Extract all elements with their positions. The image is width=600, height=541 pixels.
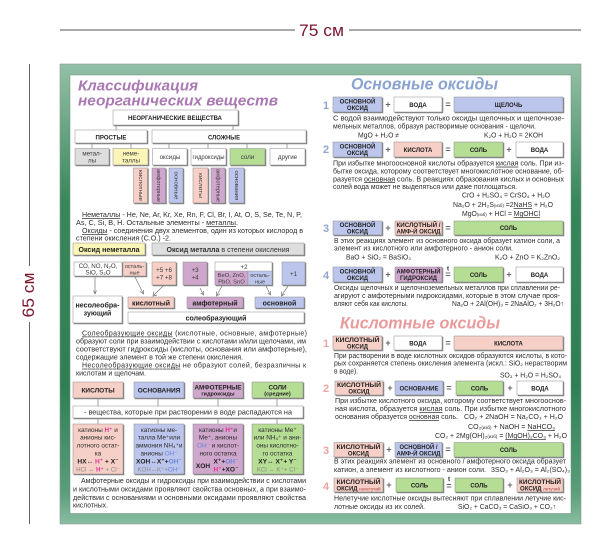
text: acid reaction 3 explanation (334, 458, 570, 474)
box: +5 +6 +7 +8: +7 +8 (156, 274, 172, 282)
acid reaction 3: acidic oxide + basic/amphoteric oxide: КИСЛОТНЫЙ (336, 443, 380, 451)
vertical box: acids (193, 168, 208, 203)
acid reaction 4: non-volatile acidic oxide + salt (323, 477, 563, 493)
box: +2 group (215, 262, 272, 285)
box: amphoteric dissociation (193, 424, 243, 474)
box: amphoteric dissociation: H⁺+XO⁻ (213, 466, 239, 474)
box: amphoteric oxide type (187, 297, 243, 308)
acid reaction 4: non-volatile acidic oxide + salt: СОЛЬ (411, 484, 429, 490)
text: reaction 3 explanation (334, 237, 560, 262)
acid reaction 4: non-volatile acidic oxide + salt: ОКСИД летучий (520, 486, 560, 492)
box: acids: КИСЛОТЫ (81, 388, 115, 394)
box: salts medium (252, 382, 303, 398)
text: acid reaction 1 explanation: При растворении в воде кислотных оксидов образуются кислоты, в кото- (334, 352, 568, 360)
acid reaction 2: acidic oxide + base: ВОДА (531, 386, 549, 392)
box: simple: ПРОСТЫЕ (96, 136, 126, 142)
acid reaction 1: acidic oxide + water: + (385, 338, 391, 348)
box: acids dissociation: лотного остат- (77, 442, 119, 450)
text: reaction 3 explanation: В этих реакциях элемент из основного оксида образует катион соли, а (334, 237, 560, 245)
reaction 4: basic oxide + amphoteric hydroxide: ОСНОВНОЙ (340, 268, 375, 276)
dimension: height 65 cm: 65 см (19, 272, 38, 318)
title: classification: неорганических веществ (78, 92, 278, 110)
bar: dissociation statement: - вещества, которые при растворении в воде распадаются на (84, 410, 292, 416)
text: salt-forming oxides (76, 330, 307, 378)
text: reaction 2 explanation: бытке оксида, которому соответствует многокислотное основание, об- (333, 168, 565, 176)
box: salt-forming (128, 312, 304, 323)
box: salts dissociation: катионы Me⁺ (258, 427, 297, 434)
box: acidic oxide type (128, 297, 174, 308)
acid reaction 2: acidic oxide + base: ОКСИД (348, 390, 370, 396)
text: reaction 1 explanation: MgO + H₂O ≠ (358, 132, 399, 140)
box: bases dissociation: анионы OH⁻ (140, 450, 178, 458)
oxide classification diagram (73, 243, 305, 323)
text: acid reaction 2 explanation: CO₂ + 2Mg(OH)₂(изб) = (MgOH)₂CO₃ + H₂O (435, 433, 568, 440)
box: +3 +4: +3 (191, 267, 199, 274)
acid reaction 2: acidic oxide + base: КИСЛОТНЫЙ (337, 381, 381, 389)
acid reaction 3: acidic oxide + basic/amphoteric oxide: АМФ-Й ОКСИД (396, 449, 441, 457)
reaction 4: basic oxide + amphoteric hydroxide: + (506, 270, 512, 280)
text: reaction 2 explanation: При избытке многоосновной кислоты образуется кислая соль. При из- (333, 160, 565, 168)
box: salts dissociation (252, 424, 303, 474)
vertical box: acidic (134, 168, 148, 203)
acid reaction 2: acidic oxide + base: + (507, 383, 513, 393)
text: acid reaction 2 explanation: При избытке кислотного оксида, которому соответствует многооснов- (335, 397, 567, 405)
box: acids dissociation: анионы кис- (80, 434, 116, 442)
box: salt-forming: солеобразующий (186, 314, 246, 322)
classes of electrolytes (73, 382, 303, 474)
text: salt-forming oxides: образуют соли при взаимодействии с кислотами и/или щелочами, им (76, 338, 306, 346)
acid reaction 2: acidic oxide + base: ОСНОВАНИЕ (399, 386, 439, 392)
box: acidic oxide type: кислотный (132, 300, 170, 308)
reaction 2: basic oxide + acid: ВОДА (531, 148, 549, 154)
text: reaction 2 explanation: разуется основная соль. В реакциях образования кислых и основных (333, 175, 565, 183)
text: reaction 1 explanation: K₂O + H₂O = 2KOH (484, 132, 543, 140)
acid reaction 3: acidic oxide + basic/amphoteric oxide: = (445, 444, 451, 454)
vertical box: amphoteric (152, 168, 166, 203)
acid reaction 3: acidic oxide + basic/amphoteric oxide: ОКСИД (348, 451, 370, 457)
reaction 3: basic oxide + acidic/amphoteric oxide: ОСНОВНОЙ (340, 221, 375, 229)
box: bases dissociation: аммония NH₄⁺и (135, 442, 183, 450)
acid reaction 4: non-volatile acidic oxide + salt: + (386, 480, 392, 490)
box: oxides (152, 148, 187, 165)
box: bases: ОСНОВАНИЯ (138, 388, 181, 394)
vertical box: acids: кислоты (197, 173, 203, 198)
box: basic oxide type (255, 297, 304, 308)
acid reaction 3: acidic oxide + basic/amphoteric oxide (323, 442, 563, 457)
box: salts dissociation: или NH₄⁺ и ани- (254, 434, 301, 442)
heading: basic oxides: Основные оксиды (351, 74, 498, 94)
acid reaction 1: acidic oxide + water: ВОДА (409, 342, 427, 348)
reaction 2: basic oxide + acid: + (385, 144, 391, 154)
acid reaction 4: non-volatile acidic oxide + salt: + (507, 480, 513, 490)
acid reaction 1: acidic oxide + water: 1 (323, 338, 329, 350)
acid reaction 2: acidic oxide + base: = (446, 383, 452, 393)
text: amphoteric note: и кислотными оксидами проявляют свойства основных, а при взаимо- (73, 486, 307, 494)
text: nonmetals and oxides definition: Оксиды - соединения двух элементов, один из которых кислород в (82, 228, 303, 235)
box: non-salt-forming: зующий (84, 310, 111, 318)
arrows to oxide types (94, 276, 288, 296)
box: metal oxide: Оксид металла в степени окисления (166, 245, 290, 254)
box: simple (75, 130, 147, 143)
text: reaction 2 explanation: солей вода может не выделяться или даже поглощаться. (333, 183, 517, 191)
text: acid reaction 4 explanation: Нелетучие кислотные оксиды вытесняют при сплавлении летучие кис- (334, 496, 567, 502)
text: acid reaction 1 explanation (334, 352, 568, 380)
reaction 1: basic oxide + water: ОКСИД (347, 106, 369, 112)
reaction 1: basic oxide + water: ОСНОВНОЙ (340, 98, 375, 106)
box: complex (152, 130, 306, 143)
box: acids dissociation: HCl ↔ H⁺ + Cl⁻ (76, 466, 120, 474)
acid reaction 3: acidic oxide + basic/amphoteric oxide: + (386, 444, 392, 454)
reaction 1: basic oxide + water: ЩЕЛОЧЬ (495, 103, 523, 109)
text: reaction 1 explanation: С водой взаимодействуют только оксиды щелочных и щелочнозе- (333, 115, 565, 123)
text: reaction 4 explanation: вляют себя как кислоты. (334, 300, 408, 308)
reaction 4: basic oxide + amphoteric hydroxide (323, 266, 563, 282)
text: acid reaction 4 explanation: лотные оксиды из их солей. (334, 503, 425, 511)
poster frame (60, 64, 581, 524)
acid reaction 4: non-volatile acidic oxide + salt: t (448, 477, 450, 483)
box: nonmetals (113, 148, 148, 165)
text: reaction 1 explanation (333, 115, 565, 140)
box: salts: соли (241, 154, 255, 161)
box: nonmetal oxide (73, 243, 145, 255)
reaction 4: basic oxide + amphoteric hydroxide: АМФОТЕРНЫЙ (396, 268, 440, 276)
box: metals: лы (88, 158, 97, 164)
text: reaction 2 explanation (333, 160, 565, 218)
reaction 2: basic oxide + acid: + (506, 144, 512, 154)
reaction 2: basic oxide + acid (323, 142, 563, 157)
box: salts dissociation: XY↔ X⁺+ Y⁻ (258, 458, 297, 466)
text: acid reaction 2 explanation: основания образуется основная соль. (335, 413, 458, 421)
reaction 2: basic oxide + acid: 2 (323, 144, 329, 156)
reaction 1: basic oxide + water: ВОДА (409, 103, 427, 109)
vertical box: basic: основные (172, 172, 178, 200)
box: acids dissociation (73, 424, 123, 474)
title: classification (78, 78, 278, 110)
classification tree (75, 110, 306, 203)
text: reaction 3 explanation: элемент из кислотного или амфотерного - анион соли. (334, 246, 513, 253)
box: metals: метал- (82, 150, 102, 158)
box: amphoteric oxide type: амфотерный (192, 300, 238, 308)
text: acid reaction 2 explanation: ная кислота, образуется кислая соль. При избытке многокислотного (335, 405, 566, 413)
box: amphoteric dissociation: OH⁻ и кислот- (197, 442, 239, 450)
box: +3 +4 (183, 262, 207, 285)
text: reaction 4 explanation: агируют с амфотерными гидроксидами, которые в этом случае проя- (334, 293, 561, 300)
reaction 1: basic oxide + water (323, 97, 563, 112)
box: +5 +6 +7 +8 (152, 262, 176, 285)
box: others (270, 148, 305, 165)
text: acid reaction 3 explanation: катион, а элемент из кислотного - анион соли. (334, 467, 486, 474)
text: salt-forming oxides: содержащие элемент в той же степени окисления. (76, 354, 243, 362)
text: acid reaction 3 explanation: В этих реакциях элемент из основного / амфотерного оксида образует (334, 458, 567, 466)
box: bases dissociation (134, 424, 184, 474)
text: reaction 4 explanation: Na₂O + 2Al(OH)₃ = 2NaAlO₂ + 3H₂O↑ (452, 301, 564, 308)
reaction 3: basic oxide + acidic/amphoteric oxide: СОЛЬ (500, 226, 518, 232)
reaction 2: basic oxide + acid: ОКСИД (347, 151, 369, 157)
box: amphoteric dissociation: катионы H⁺и (199, 427, 237, 434)
reaction 3: basic oxide + acidic/amphoteric oxide: КИСЛОТНЫЙ / (396, 221, 441, 229)
title: classification: Классификация (78, 78, 198, 94)
box: +5 +6 +7 +8: +5 +6 (156, 267, 172, 274)
box: inorganic substances (113, 110, 238, 125)
acid reaction 4: non-volatile acidic oxide + salt: КИСЛОТНЫЙ (336, 478, 380, 486)
box: inorganic substances: НЕОРГАНИЧЕСКИЕ ВЕЩЕСТВА (128, 116, 223, 122)
text: reaction 2 explanation: Na₂O + 2H₂S(изб) =2NaHS + H₂O (453, 202, 554, 209)
box: salts (230, 148, 265, 165)
box: +2 group: BeO, ZnO, (218, 273, 246, 279)
vertical box: basic (169, 168, 183, 203)
text: salt-forming oxides: кислотам и щелочам. (76, 371, 146, 378)
reaction 2: basic oxide + acid: КИСЛОТА (404, 148, 433, 154)
reaction 4: basic oxide + amphoteric hydroxide: СОЛЬ (470, 273, 488, 279)
reaction 3: basic oxide + acidic/amphoteric oxide: 3 (323, 223, 329, 235)
box: nonmetals: таллы (122, 158, 140, 164)
reaction 1: basic oxide + water: = (445, 100, 451, 110)
reaction 2: basic oxide + acid: ОСНОВНОЙ (340, 142, 375, 150)
box: +2 group: +2 (240, 264, 248, 271)
box: acids (73, 382, 123, 398)
text: amphoteric note: кислотных. (73, 503, 108, 510)
box: amphoteric hydroxides: гидроксиды (201, 392, 235, 398)
box: hydroxides (191, 148, 226, 165)
box: +1 (282, 262, 305, 285)
box: non-salt-forming: несолеобра- (76, 302, 120, 310)
reaction 4: basic oxide + amphoteric hydroxide: 4 (323, 270, 330, 282)
text: nonmetals and oxides definition (76, 212, 303, 242)
box: complex: СЛОЖНЫЕ (208, 136, 240, 142)
acid reaction 3: acidic oxide + basic/amphoteric oxide: 3 (323, 445, 329, 457)
acid reaction 4: non-volatile acidic oxide + salt: СОЛЬ (470, 484, 488, 490)
reaction 2: basic oxide + acid: СОЛЬ (470, 148, 488, 154)
box: acids dissociation: катионы H⁺ и (78, 427, 118, 434)
box: bases dissociation: XOH↔X⁺+OH⁻ (136, 458, 183, 466)
acid reaction 2: acidic oxide + base: СОЛЬ (471, 386, 489, 392)
text: reaction 2 explanation: CrO + H₂SO₄ = CrSO₄ + H₂O (462, 192, 551, 200)
acid reaction 1: acidic oxide + water: КИСЛОТНЫЙ (336, 336, 380, 344)
text: salt-forming oxides: Несолеобразующие оксиды не образуют солей, безразличны к (82, 362, 307, 370)
reaction 2: basic oxide + acid: = (445, 144, 451, 154)
box: salts dissociation: го остатка (263, 450, 293, 458)
box: acids dissociation: HX↔ H⁺ + X⁻ (77, 458, 119, 466)
reaction 1: basic oxide + water: 1 (323, 100, 329, 112)
acid reaction 3: acidic oxide + basic/amphoteric oxide: ОСНОВНОЙ / (400, 443, 438, 451)
text: acid reaction 4 explanation: SiO₂ + CaCO₃ = CaSiO₃ + CO₂↑ (458, 504, 556, 511)
box: nonmetal oxide: Оксид неметалла (78, 245, 140, 254)
reaction 4: basic oxide + amphoteric hydroxide: t (447, 266, 449, 272)
box: salts dissociation: KCl ↔ K⁺+ Cl⁻ (257, 466, 298, 474)
text: amphoteric note: Амфотерные оксиды и гидроксиды при взаимодействии с кислотами (81, 477, 306, 485)
text: acid reaction 1 explanation: SO₃ + H₂O = H₂SO₄ (500, 372, 561, 380)
box: +3 +4: +4 (191, 274, 199, 282)
box: salts dissociation: оны кислотно- (256, 442, 299, 450)
reaction 1: basic oxide + water: + (385, 100, 391, 110)
reaction 4: basic oxide + amphoteric hydroxide: + (385, 270, 391, 280)
text: reaction 1 explanation: мельных металлов, образуя растворимые основания - щелочи. (333, 122, 536, 130)
reaction 3: basic oxide + acidic/amphoteric oxide (323, 221, 563, 236)
box: metal oxide (152, 243, 304, 255)
reaction 3: basic oxide + acidic/amphoteric oxide: + (385, 223, 391, 233)
text: reaction 2 explanation: MgO(изб) + HCl = MgOHCl (462, 211, 540, 218)
box: amphoteric dissociation: Me⁺, анионы (199, 434, 237, 442)
vertical box: bases (229, 168, 244, 203)
text: acid reaction 1 explanation: в воде). (334, 369, 358, 376)
box: others: другие (278, 154, 298, 161)
reaction 4: basic oxide + amphoteric hydroxide: ОКСИД (347, 276, 369, 282)
text: reaction 4 explanation (334, 285, 564, 308)
box: +2 group: осталь- (250, 273, 270, 279)
box: +2 group: ные (255, 279, 265, 285)
box: salts medium: СОЛИ (268, 384, 287, 392)
text: acid reaction 2 explanation: CO₂ + 2NaOH = Na₂CO₃ + H₂O (464, 414, 564, 421)
text: acid reaction 4 explanation (334, 496, 567, 511)
acid reaction 4: non-volatile acidic oxide + salt: ОКСИД нелетучий (336, 486, 381, 492)
text: reaction 3 explanation: K₂O + ZnO = K₂ZnO₂ (495, 254, 560, 262)
box: non-salt-forming list: CO, NO, N₂O, (79, 263, 118, 270)
vertical box: amphoteric: амфотерные (155, 169, 161, 202)
box: non-salt-forming list (74, 262, 122, 276)
box: +1: +1 (290, 271, 298, 278)
dimension: width 75 cm: 75 см (299, 21, 344, 40)
box: others pink: ные (129, 270, 140, 276)
box: acids dissociation: ка (95, 450, 102, 458)
reaction 3: basic oxide + acidic/amphoteric oxide: ОКСИД (347, 230, 369, 236)
box: hydroxides: гидроксиды (192, 154, 225, 161)
acid reaction 2: acidic oxide + base: + (387, 383, 393, 393)
text: amphoteric note: действии с основаниями и основными оксидами проявляют свойства (73, 494, 306, 502)
box: amphoteric dissociation: X⁺+OH⁻ (213, 458, 239, 466)
text: salt-forming oxides: Солеобразующие оксиды (кислотные, основные, амфотерные) (82, 330, 307, 338)
box: amphoteric dissociation: ного остатка (199, 450, 237, 458)
text: nonmetals and oxides definition: степени окисления (С.О.) -2. (76, 236, 171, 242)
vertical box: bases: основания (233, 171, 239, 201)
acid reaction 2: acidic oxide + base (323, 381, 563, 396)
text: reaction 3 explanation: BaO + SiO₂ = BaSiO₃ (346, 254, 411, 262)
text: acid reaction 2 explanation: CO₂(изб) + NaOH = NaHCO₃ (468, 424, 555, 431)
box: oxides: оксиды (160, 154, 181, 161)
heading: acidic oxides: Кислотные оксиды (340, 314, 500, 332)
acid reaction 3: acidic oxide + basic/amphoteric oxide: СОЛЬ (500, 448, 518, 454)
reaction 4: basic oxide + amphoteric hydroxide: ГИДРОКСИД (400, 276, 438, 282)
box: bases (134, 382, 184, 398)
acid reaction 1: acidic oxide + water: ОКСИД (347, 344, 369, 350)
vertical box: acidic: кислотные (137, 170, 143, 201)
reaction 4: basic oxide + amphoteric hydroxide: = (445, 270, 451, 280)
acid reaction 2: acidic oxide + base: 2 (323, 383, 329, 395)
bar: dissociation statement (73, 406, 303, 418)
acid reaction 4: non-volatile acidic oxide + salt: КИСЛОТНЫЙ (519, 478, 561, 486)
box: amphoteric hydroxides: АМФОТЕРНЫЕ (194, 384, 242, 392)
box: others pink (123, 262, 146, 276)
acid reaction 4: non-volatile acidic oxide + salt: = (446, 481, 452, 491)
acid reaction 1: acidic oxide + water (323, 336, 563, 350)
box: basic oxide type: основной (263, 300, 296, 308)
text: acid reaction 1 explanation: рых сохраняется степень окисления элемента (искл.: SiO₂ нерастворим (334, 361, 567, 368)
box: non-salt-forming list: SiO, S₂O (85, 270, 111, 276)
text: salt-forming oxides: соответствуют гидроксиды (кислоты, основания или амфотерные), (76, 346, 307, 354)
box: metals (75, 148, 109, 165)
reaction 3: basic oxide + acidic/amphoteric oxide: АМФ-Й ОКСИД (396, 228, 441, 236)
acid reaction 1: acidic oxide + water: = (445, 338, 451, 348)
box: +2 group: PbO, SnO (218, 279, 245, 285)
vertical box: amphoteric hydroxides (211, 168, 225, 203)
text: nonmetals and oxides definition: As, C, Si, B, H. Остальные элементы - металлы. (76, 220, 238, 227)
box: non-salt-forming (73, 296, 122, 323)
acid reaction 4: non-volatile acidic oxide + salt: 4 (323, 481, 330, 493)
text: acid reaction 3 explanation: 3SO₃ + Al₂O₃ = Al₂(SO₄)₃ (491, 467, 570, 474)
box: amphoteric dissociation: XOH (196, 463, 210, 470)
reaction 4: basic oxide + amphoteric hydroxide: ВОДА (531, 273, 549, 279)
text: amphoteric note (73, 477, 307, 510)
acid reaction 1: acidic oxide + water: КИСЛОТА (494, 342, 523, 348)
text: acid reaction 2 explanation (335, 397, 568, 440)
box: bases dissociation: KOH↔K⁺+OH⁻ (137, 466, 181, 474)
box: bases dissociation: катионы ме- (141, 427, 177, 434)
box: nonmetals: неме- (123, 150, 139, 158)
reaction 3: basic oxide + acidic/amphoteric oxide: = (445, 223, 451, 233)
box: amphoteric hydroxides (193, 382, 243, 398)
vertical box: amphoteric hydroxides: амфотерные (214, 169, 220, 202)
box: bases dissociation: талла Me⁺или (138, 434, 181, 442)
box: salts medium: (средние) (264, 392, 291, 398)
text: nonmetals and oxides definition: Неметаллы - He, Ne, Ar, Kr, Xe, Rn, F, Cl, Br, I, At, O, S, Se, Te, N, P, (82, 212, 302, 219)
text: reaction 4 explanation: Оксиды щелочных и щелочноземельных металлов при сплавлении ре- (334, 285, 561, 292)
box: others pink: осталь- (125, 264, 144, 270)
